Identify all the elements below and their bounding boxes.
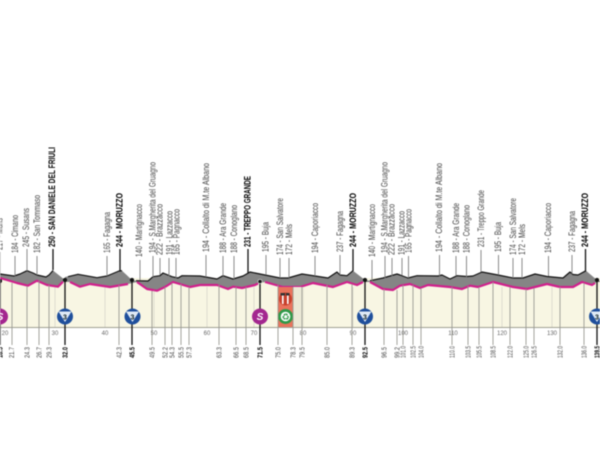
icon: climb badge 32 km: 3 (63, 314, 67, 322)
place labels above profile (0, 147, 590, 281)
tick group: regular distances: 85.0 (322, 347, 332, 358)
km scale: 30 (52, 331, 59, 337)
label: Brazzacco: 222 - Brazzacco (154, 204, 164, 255)
label: Collalto di M.te Albano: 194 - Collalto di M.te Albano (434, 163, 444, 252)
label: S.Margherita del Gruagno: 194 - S.Margherita del Gruagno (380, 162, 390, 253)
label: Conoglano: 188 - Conoglano (229, 205, 239, 253)
km scale: 80 (300, 331, 307, 337)
label: Brazzacco (154, 204, 164, 275)
label: Martignacco: 140 - Martignacco (367, 204, 377, 257)
label: Mels: 172 - Mels (517, 224, 527, 255)
tick group: passage distances: 32.0 (60, 347, 70, 358)
tick group: regular distances: 79.5 (298, 347, 306, 358)
tick group: regular distances: 132.0 (556, 346, 564, 358)
tick group: regular distances: 55.5 (176, 347, 186, 358)
tick group: regular distances: 21.7 (7, 347, 16, 358)
label: Buja (260, 222, 270, 275)
label: Pagnacco (404, 209, 414, 278)
label: Treppo Grande: 231 - Treppo Grande (476, 190, 486, 247)
tick group: regular distances: 105.5 (474, 346, 484, 358)
tick group: passage distances: 45.5 (128, 347, 136, 358)
icon: food (279, 292, 292, 306)
tick group: regular distances: 101.0 (398, 346, 408, 358)
label: Ara Grande: 188 - Ara Grande (218, 203, 228, 253)
label: Fagagna (102, 212, 112, 276)
tick group: passage distances: 71.5 (256, 347, 264, 358)
label: Cimano: 184 - Cimano (10, 215, 20, 253)
label: Ara Grande: 188 - Ara Grande (451, 203, 461, 253)
label: Lazzacco (396, 211, 406, 275)
label: San Salvatore (275, 198, 285, 278)
profile base: cream area (0, 278, 600, 328)
tick group: regular distances: 57.3 (184, 347, 194, 358)
label: Collalto di M.te Albano (201, 163, 211, 277)
tick group: regular distances: 96.5 (380, 347, 388, 358)
distance ticks and labels below profile (0, 280, 600, 358)
passage dots (0, 278, 599, 284)
label: Conoglano: 188 - Conoglano (462, 205, 472, 253)
tick group: regular distances: 26.7 (34, 347, 44, 358)
label: Moruzzo: 244 - MORUZZO (114, 193, 124, 247)
black terrain outline (0, 270, 586, 281)
label: Caporiacco: 194 - Caporiacco (543, 203, 553, 253)
label: Collalto di M.te Albano (434, 163, 444, 276)
icon: climb badge 92 km (357, 308, 373, 324)
tick group: passage distances (0, 280, 600, 358)
label: Moruzzo (114, 193, 124, 271)
tick group: regular distances: 99.2 (392, 347, 402, 358)
label: Fagagna (335, 211, 345, 275)
tick group: regular distances: 42.3 (114, 347, 124, 358)
km scale: 90 (350, 331, 357, 337)
label: San Salvatore (508, 198, 518, 278)
label: San Tommaso: 182 - San Tommaso (32, 195, 42, 253)
label: Brazzacco (386, 204, 396, 276)
label: Treppo Grande (242, 176, 252, 273)
tick group: regular distances: 102.5 (408, 346, 418, 358)
tick group: regular distances: 49.5 (148, 347, 156, 358)
icon: sprint badge left (0, 308, 8, 324)
km scale: 60 (204, 331, 211, 337)
tick group: regular distances: 52.2 (160, 347, 170, 358)
label: San Salvatore: 174 - San Salvatore (275, 198, 285, 255)
icon: climb badge 45 km: 3 (131, 314, 135, 322)
label: Conoglano (462, 205, 472, 277)
tick group: regular distances: 66.5 (232, 347, 240, 358)
tick group: regular distances: 136.0 (580, 346, 588, 358)
label: Treppo Grande (476, 190, 486, 272)
magenta road line (0, 278, 595, 291)
icon: recycling: ♻ (281, 313, 290, 323)
axis baseline (0, 326, 600, 328)
label: Pagnacco (172, 209, 182, 278)
km scale: 110 (448, 331, 458, 337)
km scale: 120 (497, 331, 508, 337)
label: Moruzzo: 244 - MORUZZO (348, 193, 358, 247)
label: Caporiacco (310, 203, 320, 276)
tick group: regular distances: 108.5 (488, 346, 498, 358)
label: Brazzacco: 222 - Brazzacco (386, 204, 396, 255)
label: Caporiacco: 194 - Caporiacco (310, 203, 320, 253)
label: San Tommaso (32, 195, 42, 275)
label: Martignacco (134, 204, 144, 280)
label: Treppo Grande: 231 - TREPPO GRANDE (242, 176, 252, 247)
label: Susans (21, 208, 31, 271)
label: S.Margherita del Gruagno (380, 162, 390, 278)
icon: sprint badge centre: S (257, 312, 264, 323)
label: Buja (493, 222, 503, 275)
tick group: regular distances (7, 281, 588, 358)
label: Martignacco: 140 - Martignacco (134, 204, 144, 257)
profile band: grey elevation (0, 270, 600, 291)
label: Caporiacco (543, 203, 553, 276)
label: San Daniele del Friuli: 250 - SAN DANIELE DEL FRIULI (47, 147, 57, 247)
label: Ara Grande (218, 203, 228, 276)
icon: climb badge 32 km (57, 308, 73, 324)
tick group: regular distances: 125.0 (522, 346, 530, 358)
icon: climb badge 92 km: 3 (363, 314, 367, 322)
tick group: regular distances: 110.0 (448, 346, 456, 358)
km scale: 40 (102, 331, 109, 337)
label: Mels (517, 224, 527, 278)
label: Conoglano (229, 205, 239, 279)
label: Lazzacco: 191 - Lazzacco (396, 211, 406, 255)
tick group: regular distances: 63.3 (214, 347, 224, 358)
label: San Salvatore: 174 - San Salvatore (508, 198, 518, 255)
label: Collalto di M.te Albano: 194 - Collalto di M.te Albano (201, 163, 211, 252)
tick group: regular distances: 75.0 (274, 347, 282, 358)
tick group: regular distances: 78.3 (288, 347, 298, 358)
label: San Daniele del Friuli (47, 147, 57, 270)
label: Fagagna: 237 - Fagagna (567, 211, 577, 252)
label: Cimano (10, 215, 20, 276)
tick group: regular distances: 68.5 (242, 347, 250, 358)
label: Pagnacco: 165 - Pagnacco (172, 209, 182, 255)
label: Lazzacco: 191 - Lazzacco (164, 211, 174, 255)
label: Moruzzo (580, 193, 590, 271)
tick group: regular distances: 24.3 (22, 347, 32, 358)
tick group: regular distances: 103.5 (464, 346, 472, 358)
tick group: regular distances: 104.0 (416, 346, 426, 358)
tick group: passage distances: 92.5 (360, 347, 370, 358)
km scale: 100 (398, 331, 409, 337)
tick group: regular distances: 54.3 (168, 347, 176, 358)
label: S.Margherita del Gruagno (148, 162, 158, 277)
label: Ara Grande (451, 203, 461, 276)
tick group: regular distances: 89.3 (348, 347, 356, 358)
label: Fagagna (567, 211, 577, 274)
km scale: 130 (547, 331, 558, 337)
icon: climb badge 45 km (124, 308, 140, 324)
label: Buja: 195 - Buja (260, 222, 270, 252)
label: Mels (284, 224, 294, 278)
km scale: 70 (251, 331, 258, 337)
km scale (2, 287, 558, 337)
elevation profile (0, 270, 600, 328)
label: Mels: 172 - Mels (284, 224, 294, 255)
label: Buja: 195 - Buja (493, 222, 503, 252)
tick group: regular distances: 29.3 (44, 347, 54, 358)
label: Moruzzo: 244 - MORUZZO (580, 193, 590, 247)
icon: climb badge 139 km (589, 308, 600, 324)
tick group: regular distances: 122.0 (506, 346, 514, 358)
icon: climb badge 139 km: 3 (595, 314, 599, 322)
label: Lazzacco (164, 211, 174, 276)
label: Susans: 245 - Susans (21, 208, 31, 247)
label: Fagagna: 237 - Fagagna (335, 211, 345, 252)
label: Pagnacco: 165 - Pagnacco (404, 209, 414, 253)
icon: sprint badge centre (252, 308, 268, 324)
label: Martignacco (367, 204, 377, 281)
km scale: 50 (151, 331, 158, 337)
tick group: regular distances: 126.5 (530, 346, 538, 358)
label: Moruzzo (348, 193, 358, 271)
feed and recycling zone (278, 287, 304, 327)
label: Fagagna: 165 - Fagagna (102, 212, 112, 253)
km scale: 20 (2, 331, 9, 337)
label: S.Margherita del Gruagno: 194 - S.Margherita del Gruagno (148, 162, 158, 253)
